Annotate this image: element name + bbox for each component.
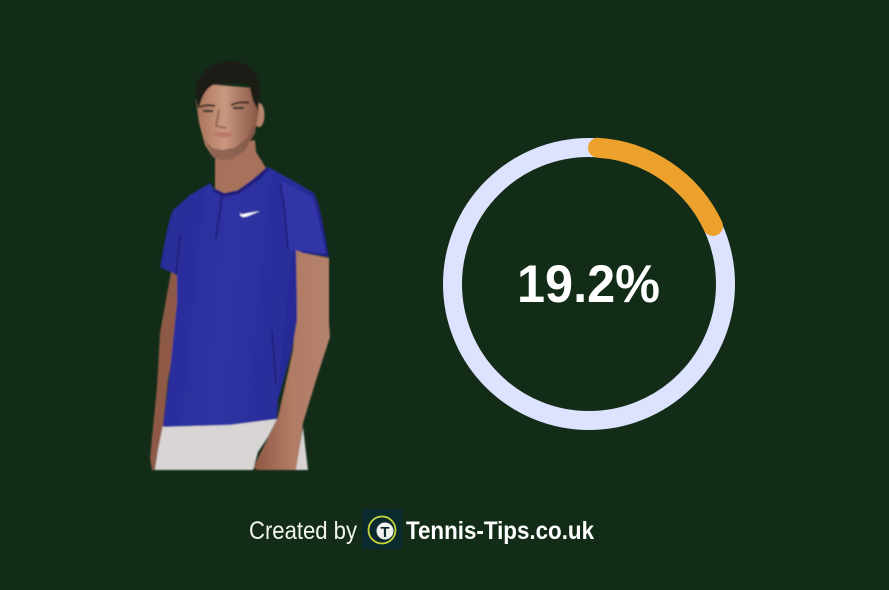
logo: T [380, 524, 390, 541]
progress arc [598, 148, 713, 226]
facial features [212, 132, 234, 138]
created by text: Created by [249, 517, 357, 545]
shirt seam and zip [176, 183, 288, 385]
player photo illustration [150, 61, 330, 470]
footer credit [249, 509, 594, 549]
value label: 19.2% [517, 255, 660, 314]
sleeve highlight [282, 182, 326, 254]
shirt [160, 167, 329, 427]
collar [214, 168, 268, 195]
site name: Tennis-Tips.co.uk [406, 517, 594, 545]
donut chart [452, 148, 726, 420]
logo [362, 509, 402, 549]
ring track [452, 148, 726, 420]
nike logo [240, 211, 260, 217]
neck [215, 140, 266, 198]
face [196, 84, 259, 161]
shorts [155, 419, 308, 470]
right arm [253, 250, 330, 470]
beard shadow [205, 124, 255, 161]
left arm [150, 272, 179, 470]
hair [196, 61, 260, 110]
ear [254, 103, 264, 127]
